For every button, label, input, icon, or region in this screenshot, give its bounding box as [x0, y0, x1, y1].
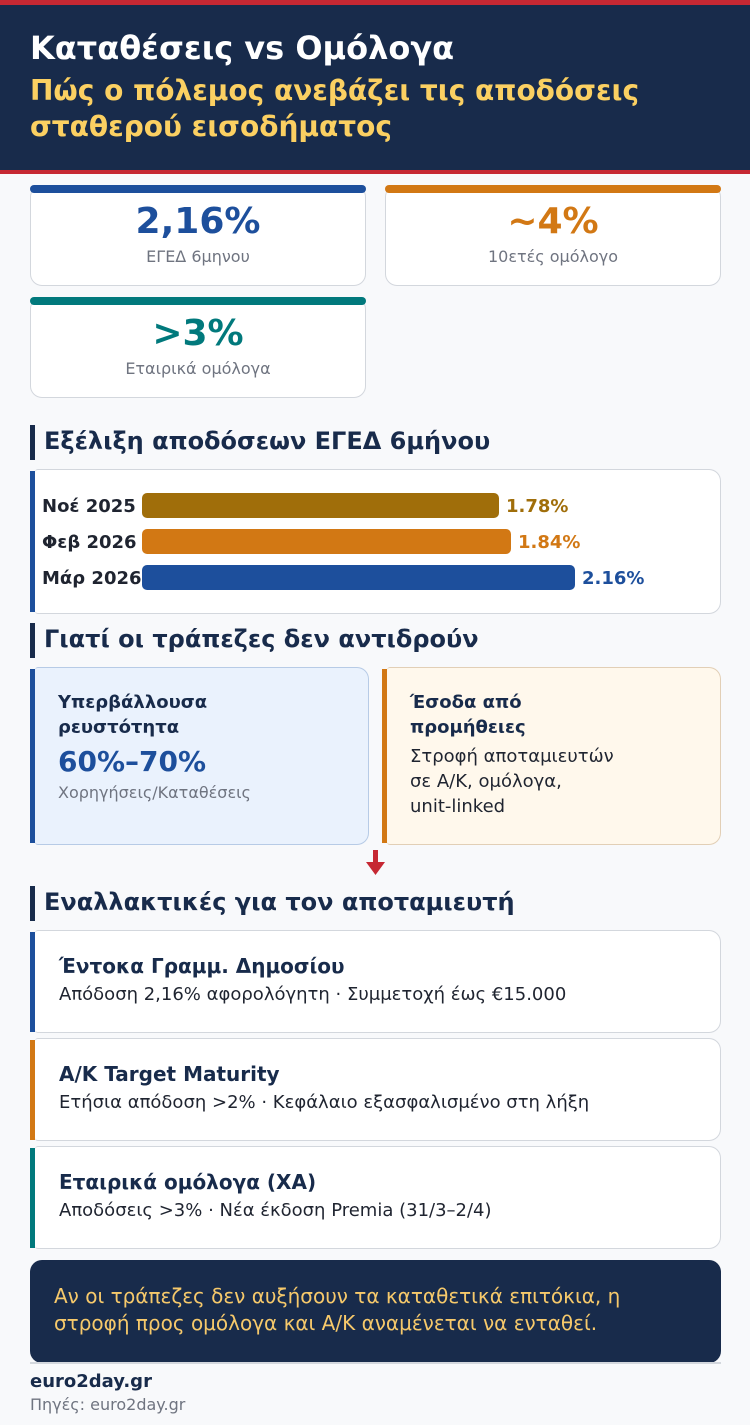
sources: Πηγές: euro2day.gr [30, 1395, 185, 1414]
label: Μάρ 2026: Μάρ 2026 [42, 568, 142, 589]
panel title: ρευστότητα [58, 717, 179, 738]
stat card: >3% [30, 297, 366, 398]
value: 1.78%: 1.78% [506, 496, 568, 517]
option title: Έντοκα Γραμμ. Δημοσίου [59, 954, 345, 978]
panel text: Στροφή αποταμιευτών [410, 746, 614, 767]
option details: Ετήσια απόδοση >2% · Κεφάλαιο εξασφαλισμένο στη λήξη [59, 1092, 589, 1113]
subtitle: Πώς ο πόλεμος ανεβάζει τις αποδόσεις [30, 74, 639, 107]
option details: Αποδόσεις >3% · Νέα έκδοση Premia (31/3–2/4) [59, 1200, 492, 1221]
option card: corporate bonds [35, 1146, 721, 1249]
panel title [410, 692, 526, 738]
callout [30, 1260, 721, 1363]
heading: why banks do not react: Γιατί οι τράπεζες δεν αντιδρούν [44, 625, 479, 653]
panel text: σε Α/Κ, ομόλογα, [410, 771, 562, 792]
label: Φεβ 2026: Φεβ 2026 [42, 532, 137, 553]
heading: alternatives: Εναλλακτικές για τον αποταμιευτή [44, 888, 515, 916]
option accent: blue [30, 932, 35, 1032]
panel accent: blue [30, 471, 35, 612]
panel value: 60%–70% [58, 745, 206, 778]
subtitle [30, 74, 639, 143]
footer [30, 1362, 721, 1422]
panel: excess liquidity [35, 667, 369, 845]
caption: 10ετές ομόλογο [488, 247, 618, 266]
option title: Εταιρικά ομόλογα (ΧΑ) [59, 1170, 316, 1194]
option accent: orange [30, 1040, 35, 1140]
stat card: ~4% [385, 185, 721, 286]
option details: Απόδοση 2,16% αφορολόγητη · Συμμετοχή έως €15.000 [59, 984, 566, 1005]
value: >3% [152, 313, 244, 354]
heading: yield evolution: Εξέλιξη αποδόσεων ΕΓΕΔ 6μήνου [44, 427, 490, 455]
callout text [54, 1284, 620, 1335]
brand: euro2day.gr [30, 1371, 152, 1392]
value: 2.16%: 2.16% [582, 568, 644, 589]
callout text: στροφή προς ομόλογα και Α/Κ αναμένεται να ενταθεί. [54, 1311, 597, 1335]
panel accent: orange [382, 669, 387, 843]
caption: Εταιρικά ομόλογα [125, 359, 271, 378]
bar: Μάρ 2026 [142, 565, 575, 590]
value: 2,16% [136, 201, 260, 242]
title: Καταθέσεις vs Ομόλογα [30, 29, 454, 67]
panel text [410, 746, 614, 817]
option title: Α/Κ Target Maturity [59, 1062, 280, 1086]
bar: Νοέ 2025 [142, 493, 499, 518]
panel accent: blue [30, 669, 35, 843]
label: Νοέ 2025: Νοέ 2025 [42, 496, 136, 517]
panel title: προμήθειες [410, 717, 526, 738]
panel: bar chart [35, 469, 721, 614]
option card: treasury bills [35, 930, 721, 1033]
arrow: down [366, 850, 385, 875]
callout text: Αν οι τράπεζες δεν αυξήσουν τα καταθετικά επιτόκια, η [54, 1284, 620, 1308]
panel text: unit-linked [410, 796, 505, 817]
panel title: Έσοδα από [410, 692, 522, 713]
bar: Φεβ 2026 [142, 529, 511, 554]
panel: fee income [387, 667, 721, 845]
caption: ΕΓΕΔ 6μηνου [146, 247, 250, 266]
panel caption: Χορηγήσεις/Καταθέσεις [58, 783, 251, 802]
option accent: teal [30, 1148, 35, 1248]
stat card accent: teal [30, 297, 366, 305]
value: ~4% [507, 201, 599, 242]
option card: target maturity [35, 1038, 721, 1141]
stat card accent: orange [385, 185, 721, 193]
header banner [0, 0, 750, 174]
panel title: Υπερβάλλουσα [58, 692, 207, 713]
value: 1.84%: 1.84% [518, 532, 580, 553]
stat card accent: blue [30, 185, 366, 193]
panel title [58, 692, 207, 738]
subtitle: σταθερού εισοδήματος [30, 110, 392, 143]
stat card: 2,16% [30, 185, 366, 286]
